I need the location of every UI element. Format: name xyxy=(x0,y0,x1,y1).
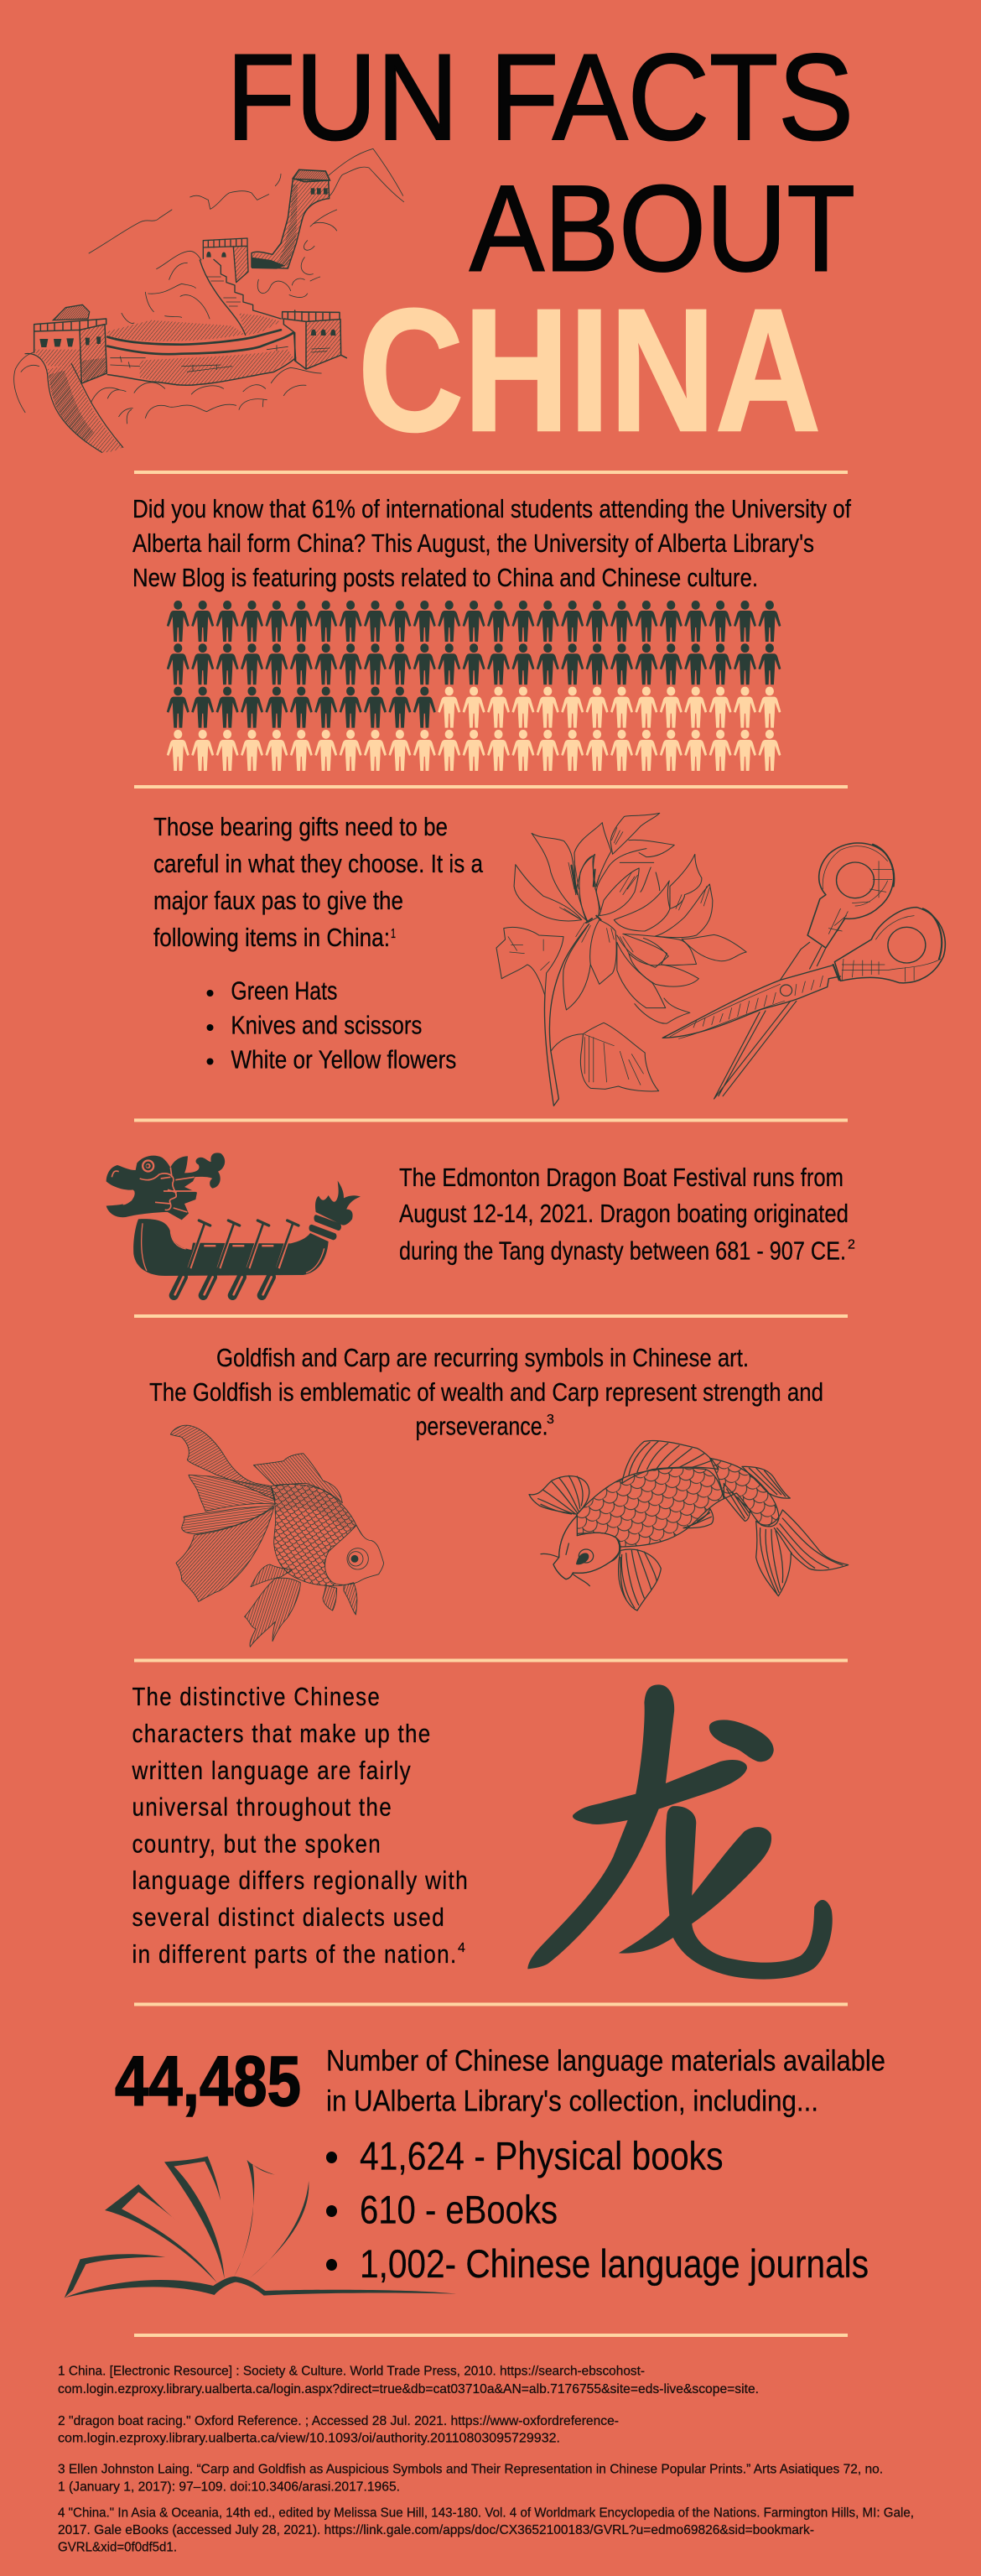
list: items to avoid: Knives and scissors xyxy=(231,1012,422,1040)
list: collection numbers: 1,002- Chinese language journals xyxy=(360,2242,869,2287)
footnotes: 1 China. [Electronic Resource] : Society & Culture. World Trade Press, 2010. https://search-ebscohost- xyxy=(58,2364,645,2379)
icon: chinese dragon character xyxy=(527,1684,833,1980)
text: dragon boat festival xyxy=(399,1163,855,1265)
text: chinese written language: written language are fairly xyxy=(132,1756,412,1785)
text: gift giving: careful in what they choose. It is a xyxy=(153,850,483,878)
illustration: great wall xyxy=(14,148,404,452)
text: chinese written language: universal throughout the xyxy=(132,1793,392,1822)
text: dragon boat festival: August 12-14, 2021. Dragon boating originated xyxy=(399,1200,849,1228)
divider xyxy=(134,1659,848,1663)
footnotes: GVRL&xid=0f0df5d1. xyxy=(58,2540,177,2555)
divider xyxy=(134,1314,848,1318)
divider xyxy=(134,785,848,788)
title: ABOUT xyxy=(470,159,855,297)
text: international students intro: New Blog is featuring posts related to China and Chinese culture. xyxy=(132,564,758,592)
illustration: scissors xyxy=(662,843,945,1099)
list: collection numbers: 610 - eBooks xyxy=(360,2188,558,2233)
list: collection numbers xyxy=(326,2134,869,2287)
text: international students intro xyxy=(132,495,851,592)
divider xyxy=(134,2334,848,2337)
text: chinese written language xyxy=(132,1683,469,1969)
text: international students intro: Did you know that 61% of international students attending the University of xyxy=(132,495,851,523)
list: collection numbers: 41,624 - Physical books xyxy=(360,2134,723,2179)
list: items to avoid: Green Hats xyxy=(231,976,337,1005)
text: gift giving: 1 xyxy=(391,927,396,941)
icon: open book xyxy=(65,2157,456,2298)
footnotes: 3 Ellen Johnston Laing. “Carp and Goldfish as Auspicious Symbols and Their Representation in Chinese Popular Prints.” Arts Asiatiques 72, no. xyxy=(58,2463,883,2476)
title xyxy=(226,29,855,468)
text: dragon boat festival: The Edmonton Dragon Boat Festival runs from xyxy=(399,1163,843,1192)
illustration: carp xyxy=(529,1440,849,1611)
footnotes xyxy=(58,2364,914,2555)
divider xyxy=(134,1119,848,1122)
text: gift giving: following items in China: xyxy=(153,924,390,952)
title: CHINA xyxy=(358,273,821,468)
footnotes: com.login.ezproxy.library.ualberta.ca/login.aspx?direct=true&db=cat03710a&AN=alb.7176755&site=eds-live&scope=site. xyxy=(58,2382,759,2396)
stat: 44,485: 44,485 xyxy=(115,2042,301,2121)
text: library collection intro xyxy=(326,2045,885,2117)
text: goldfish and carp: The Goldfish is emblematic of wealth and Carp represent strength and xyxy=(149,1378,823,1407)
title: FUN FACTS xyxy=(226,29,854,165)
text: international students intro: Alberta hail form China? This August, the University of Alberta Library's xyxy=(132,529,814,558)
icon: dragon boat xyxy=(106,1153,361,1295)
text: chinese written language: 4 xyxy=(458,1941,465,1955)
text: dragon boat festival: 2 xyxy=(848,1238,855,1252)
text: gift giving xyxy=(153,813,483,952)
text: library collection intro: in UAlberta Library's collection, including... xyxy=(326,2085,818,2117)
footnotes: 2017. Gale eBooks (accessed July 28, 2021). https://link.gale.com/apps/doc/CX3652100183/GVRL?u=edmo69826&sid=bookmark- xyxy=(58,2523,814,2537)
footnotes: com.login.ezproxy.library.ualberta.ca/view/10.1093/oi/authority.20110803095729932. xyxy=(58,2431,560,2446)
text: goldfish and carp xyxy=(149,1344,823,1441)
text: chinese written language: characters that make up the xyxy=(132,1720,431,1748)
illustration: goldfish xyxy=(170,1425,384,1647)
text: dragon boat festival: during the Tang dynasty between 681 - 907 CE. xyxy=(399,1236,846,1265)
text: chinese written language: language differs regionally with xyxy=(132,1866,469,1895)
list: items to avoid xyxy=(206,976,456,1074)
illustration: flower xyxy=(496,813,746,1106)
text: chinese written language: several distinct dialects used xyxy=(132,1903,445,1932)
footnotes: 1 (January 1, 2017): 97–109. doi:10.3406/arasi.2017.1965. xyxy=(58,2480,400,2495)
text: chinese written language: country, but the spoken xyxy=(132,1830,382,1859)
divider xyxy=(134,471,848,474)
text: library collection intro: Number of Chinese language materials available xyxy=(326,2045,885,2077)
text: goldfish and carp: perseverance. xyxy=(416,1413,548,1441)
text: gift giving: major faux pas to give the xyxy=(153,887,403,915)
text: chinese written language: The distinctive Chinese xyxy=(132,1683,381,1711)
chart: 61 of 100 people pictogram xyxy=(167,601,781,771)
text: gift giving: Those bearing gifts need to be xyxy=(153,813,448,841)
list: items to avoid: White or Yellow flowers xyxy=(231,1045,456,1074)
divider xyxy=(134,2003,848,2006)
footnotes: 4 "China." In Asia & Oceania, 14th ed., edited by Melissa Sue Hill, 143-180. Vol. 4 of Worldmark Encyclopedia of the Nations. Farmington Hills, MI: Gale, xyxy=(58,2506,914,2520)
footnotes: 2 "dragon boat racing." Oxford Reference. ; Accessed 28 Jul. 2021. https://www-oxfordreference- xyxy=(58,2414,619,2428)
text: goldfish and carp: 3 xyxy=(547,1413,554,1427)
text: chinese written language: in different parts of the nation. xyxy=(132,1940,458,1969)
text: goldfish and carp: Goldfish and Carp are recurring symbols in Chinese art. xyxy=(216,1344,749,1372)
